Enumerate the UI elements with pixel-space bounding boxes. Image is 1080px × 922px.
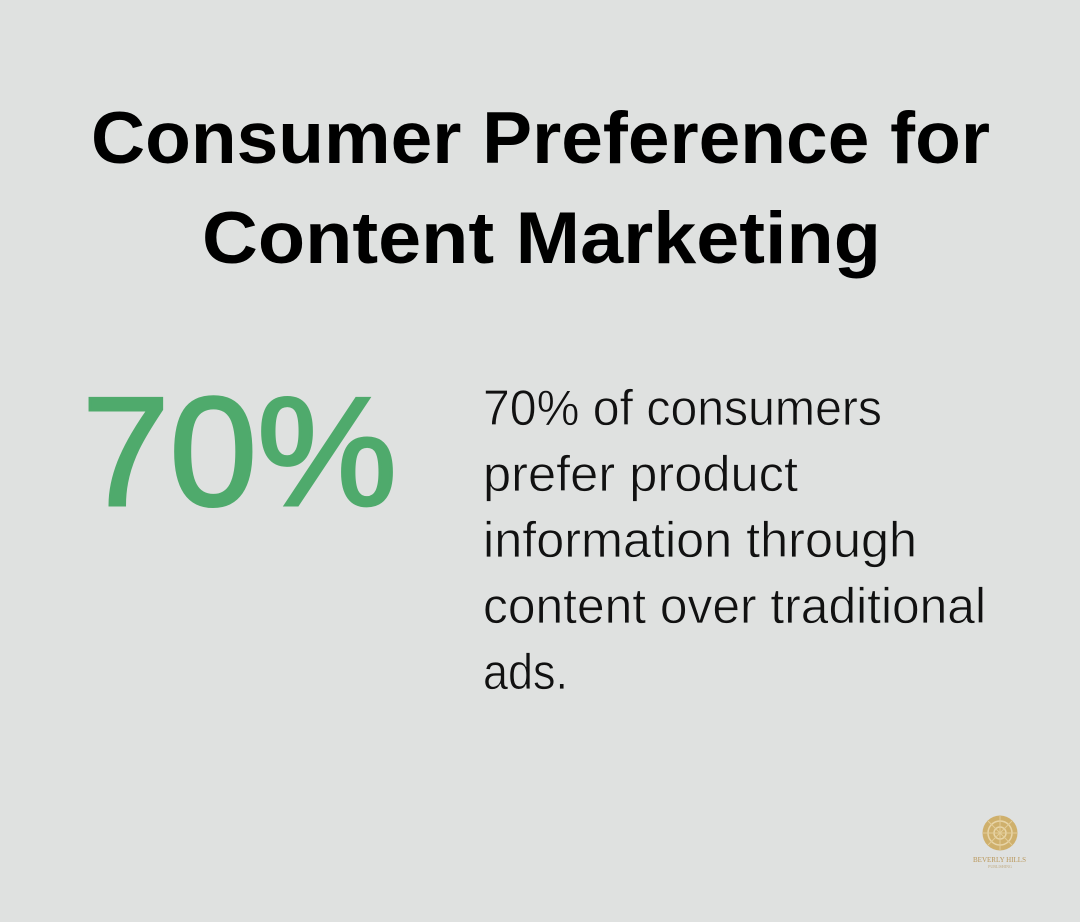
description text (483, 380, 986, 700)
title: Content Marketing (202, 198, 881, 279)
icon: gold medallion (982, 816, 1018, 850)
description text: information through (483, 512, 917, 568)
logo: Beverly Hills Publishing (973, 816, 1026, 869)
title: Consumer Preference for (91, 98, 990, 179)
title (91, 98, 990, 279)
description text: content over traditional (483, 578, 986, 634)
logo tagline: PUBLISHING (988, 864, 1012, 869)
description text: prefer product (483, 446, 798, 502)
description text: 70% of consumers (483, 380, 882, 436)
description text: ads. (483, 644, 568, 700)
logo wordmark: BEVERLY HILLS (973, 855, 1026, 864)
big stat: 70%: 70% (82, 365, 397, 538)
